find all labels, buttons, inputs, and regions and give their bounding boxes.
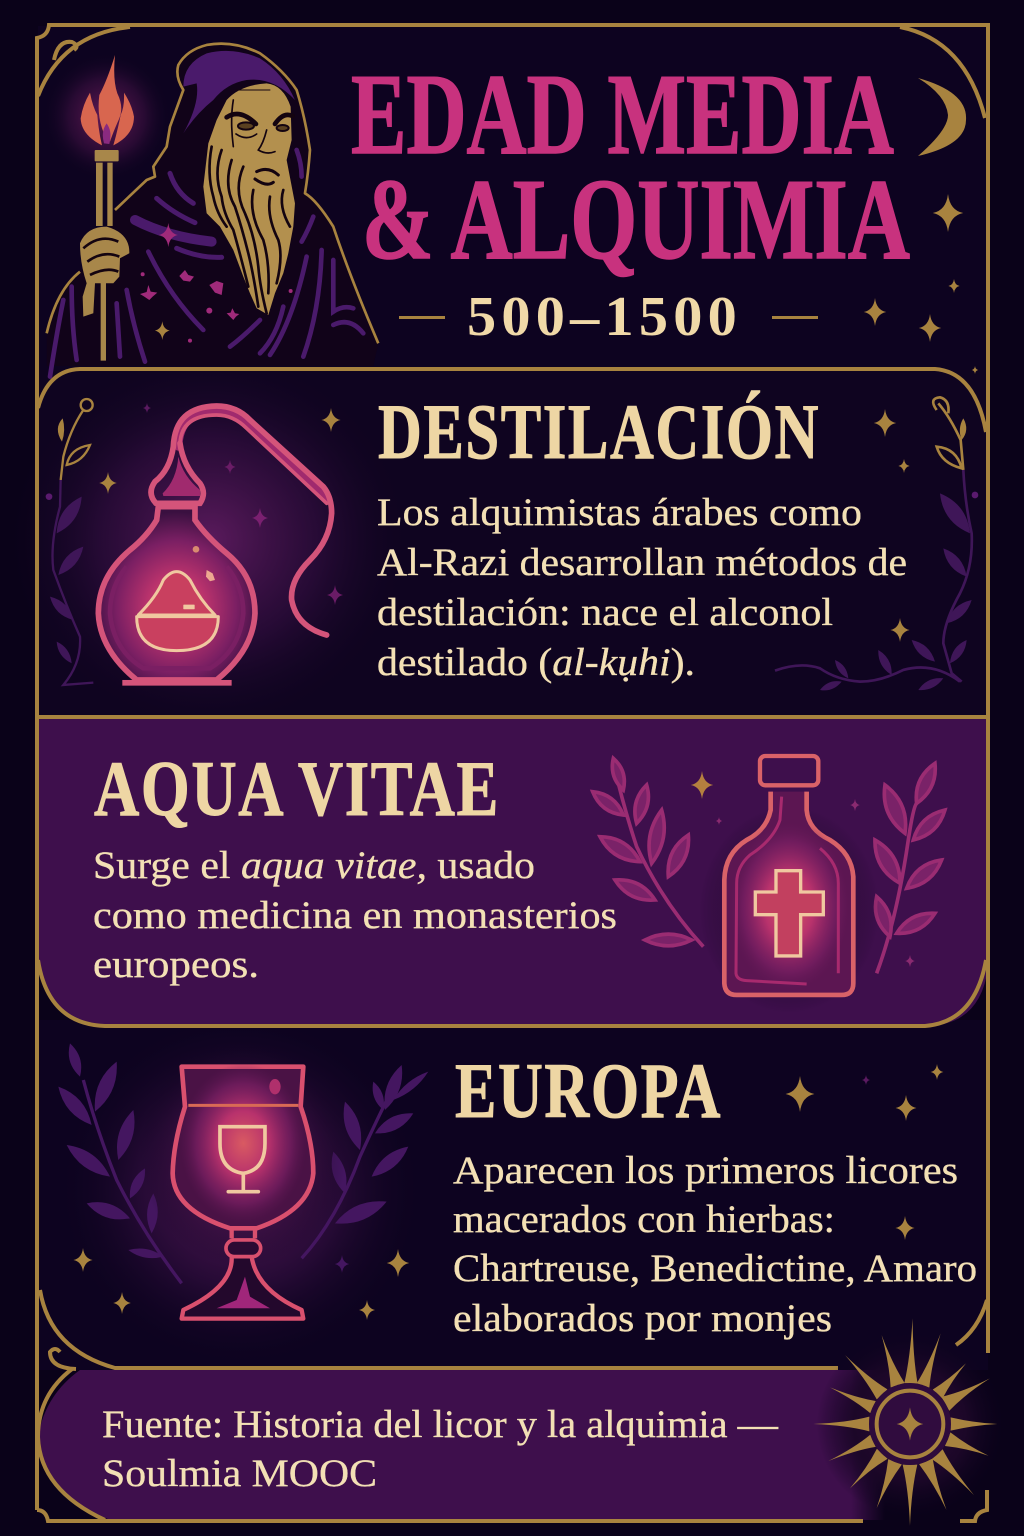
sun star [897,1407,923,1441]
header stars [864,194,978,374]
stem knob [226,1240,261,1257]
text: europa: macerados con hierbas: [453,1198,835,1241]
sun halo [817,1331,1003,1517]
text: aqua vitae: Surge el aqua vitae, usado [93,844,535,887]
flame [81,55,134,145]
foot highlight [217,1277,270,1308]
icon: goblet [140,1040,347,1319]
flask inner ring [110,567,243,668]
sun rays [813,1318,997,1526]
text: destilación [377,491,907,684]
bottle cap [760,756,818,785]
panel: aqua vitae background [38,718,988,1026]
inner symbol [137,546,218,651]
stem and foot [182,1228,303,1319]
heading: europa: EUROPA [455,1047,722,1134]
text: destilación: destilado ( al-kụhi). [377,641,695,684]
vine: right [775,397,978,690]
illustration: laurel branches around goblet [58,1043,428,1283]
text: aqua vitae: como medicina en monasterios [93,894,617,937]
text: europa: Chartreuse, Benedictine, Amaro [453,1247,977,1290]
sun disc [869,1383,951,1465]
robe lower left outline [47,272,80,333]
facial features [227,90,293,184]
illustration: hooded alchemist with torch [43,43,378,377]
vine: left [46,399,93,685]
bowl light [180,1063,307,1223]
date range [399,286,818,348]
beard strands [210,147,290,313]
torch glow [43,53,170,180]
face and beard [203,83,295,315]
bottle glow [699,807,879,1013]
icon: alembic flask [98,406,332,686]
panel: footer background [38,1370,885,1520]
europa stars [73,1064,943,1320]
text: europa: elaborados por monjes [453,1297,832,1340]
text: aqua vitae [93,844,617,986]
still head fill [163,457,200,496]
illustration: laurel branches around bottle [593,758,945,973]
cross [755,871,823,956]
heading: aqua vitae: AQUA VITAE [94,745,500,832]
robe stars [140,223,293,343]
text: europa: Aparecen los primeros licores [453,1149,958,1192]
panel: destilación background [10,350,988,730]
aqua vitae star [691,771,915,967]
hand [80,227,129,317]
icon: sun [813,1318,1003,1526]
robe gold outline [115,44,378,343]
still head and tube [151,406,332,635]
text: destilación: destilación: nace el alconol [377,591,833,634]
inner line [736,797,838,984]
text: source [102,1403,779,1495]
text: source: Fuente: Historia del licor y la alquimia — [102,1403,779,1446]
inner goblet symbol [220,1127,265,1192]
robe folds [50,150,363,377]
icon: bottle with cross [699,756,879,1013]
text: europa [453,1149,977,1340]
panel: header background [38,26,988,370]
bowl [173,1067,313,1228]
destilación stars [99,403,910,642]
text: aqua vitae: europeos. [93,943,259,986]
text: destilación: Al-Razi desarrollan métodos de [377,541,907,584]
torch staff [95,150,119,361]
liquid line [188,1101,298,1110]
flask body [98,507,255,680]
bottle body [724,792,853,995]
robe silhouette [47,43,378,366]
liquid glow [728,820,851,993]
icon: crescent moon [918,78,966,156]
panel: europa background [38,1015,988,1370]
goblet glow [140,1040,347,1267]
heading: destilación: DESTILACIÓN [378,388,820,475]
bubble [269,1079,281,1094]
gold star on robe [155,321,170,340]
flask base [122,680,232,686]
text: source: Soulmia MOOC [102,1452,377,1495]
hood purple [183,51,295,133]
title [351,51,910,284]
date range: 500–1500 [467,286,742,348]
text: destilación: Los alquimistas árabes como [377,491,862,534]
